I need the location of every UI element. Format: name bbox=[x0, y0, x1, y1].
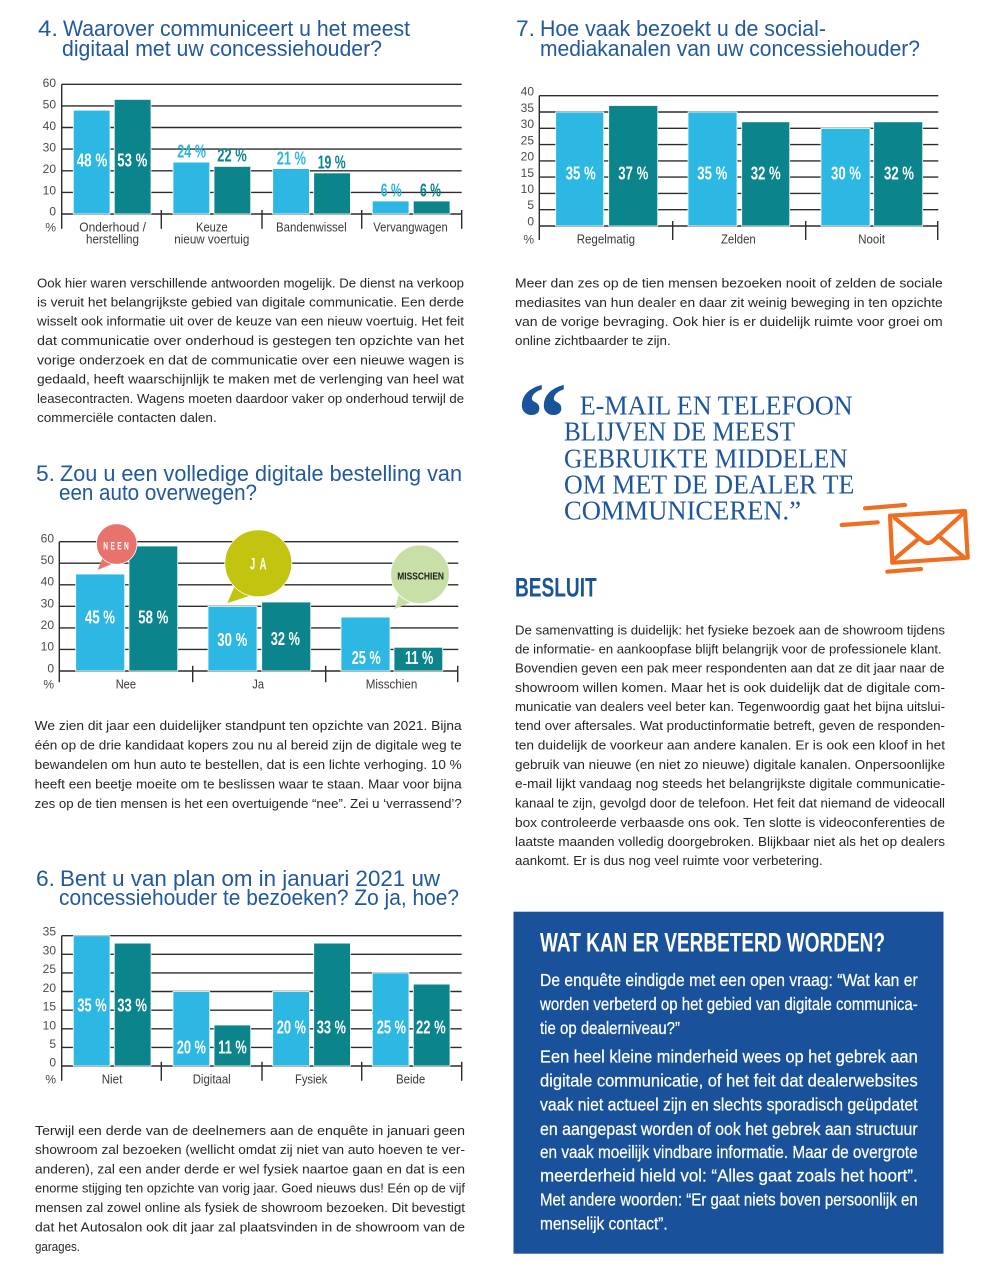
bar chart: question 7: 30 % bbox=[831, 162, 861, 183]
bar chart: question 4: 6 % bbox=[381, 180, 402, 201]
bar chart: question 5: 58 % bbox=[138, 606, 168, 627]
text block: Besluit: tend over aftersales. Wat productinformatie betreft, geven de responden- bbox=[515, 718, 945, 733]
text block: question 6: dat het Autosalon ook dit jaar zal plaatsvinden in de showroom van de bbox=[35, 1219, 465, 1234]
bar chart: question 6: Beide bbox=[396, 1072, 425, 1086]
text block: question 6: showroom zal bezoeken (wellicht omdat zij niet van auto hoeven te ver- bbox=[35, 1142, 465, 1157]
bar chart: question 5: 30 % bbox=[217, 629, 247, 650]
text block: question 6 bbox=[35, 1123, 465, 1254]
bar chart: question 6: 15 bbox=[43, 1000, 56, 1014]
panel text: Met andere woorden: “Er gaat niets boven persoonlijk en bbox=[540, 1190, 918, 1210]
bar chart: question 5: 50 bbox=[41, 553, 54, 567]
bar chart: question 4: % bbox=[45, 220, 56, 234]
panel text: digitale communicatie, of het feit dat dealerwebsites bbox=[540, 1071, 918, 1091]
text block: question 5: heeft een beetje moeite om te beslissen waar te staan. Maar voor bijna bbox=[35, 777, 462, 792]
bar chart: question 7: 35 bbox=[521, 101, 534, 115]
text block: Besluit: ten duidelijk de voorkeur aan andere kanalen. Er is ook een kloof in het bbox=[515, 738, 945, 752]
text block: Besluit: laatste maanden volledig doorgebroken. Blijkbaar niet als het op dealers bbox=[515, 834, 946, 849]
bar chart: question 5: 11 % bbox=[405, 647, 433, 668]
bar chart: question 4: 50 bbox=[43, 98, 56, 112]
text block: question 4: dat communicatie over onderhoud is gestegen ten opzichte van het bbox=[37, 333, 464, 348]
text block: Besluit: kanaal te zijn, gevolgd door de telefoon. Het feit dat niemand de videocall bbox=[515, 796, 945, 810]
bar chart: question 5: 25 % bbox=[352, 647, 381, 668]
bar chart: question 7: 30 bbox=[521, 117, 534, 131]
text block: Besluit bbox=[515, 622, 946, 868]
pull quote: OM MET DE DEALER TE bbox=[564, 469, 854, 499]
bar chart: question 5: Misschien bbox=[366, 677, 417, 691]
speech bubble: MISSCHIEN bbox=[391, 545, 449, 609]
heading: question 6: Bent u van plan om in januari 2021 uw bbox=[60, 866, 440, 891]
bar chart: question 6: 20 bbox=[43, 981, 56, 995]
bar chart: question 6: 20 % bbox=[177, 1036, 206, 1057]
text block: Besluit: de informatie- en aankoopfase blijft belangrijk voor de professionele klant. bbox=[515, 641, 942, 656]
pull quote bbox=[517, 362, 854, 525]
text block: question 6: enorme stijging ten opzichte van vorig jaar. Goed nieuws dus! Eén op de vijf bbox=[35, 1181, 465, 1196]
text block: question 4: commerciële contacten dalen. bbox=[37, 410, 217, 425]
speech bubble: MISSCHIEN: MISSCHIEN bbox=[397, 571, 444, 582]
bar chart: question 5: 20 bbox=[41, 618, 54, 632]
bar chart: question 4: 48 % bbox=[77, 150, 107, 171]
bar chart: question 5: 40 bbox=[41, 574, 54, 588]
bar chart: question 5: 0 bbox=[47, 662, 54, 676]
bar chart: question 6: 22 % bbox=[416, 1016, 446, 1037]
bar chart: question 4: 40 bbox=[43, 119, 56, 133]
bar chart: question 4: Onderhoud / bbox=[79, 221, 147, 235]
bar chart: question 4: Keuze bbox=[196, 221, 228, 235]
text block: question 4: leasecontracten. Wagens moeten daardoor vaker op onderhoud terwijl de bbox=[37, 391, 464, 406]
bar chart: question 4: 0 bbox=[49, 204, 56, 218]
text block: question 7: van de vorige bevraging. Ook hier is er duidelijk ruimte voor groei om bbox=[515, 314, 943, 329]
heading: question 7: mediakanalen van uw concessiehouder? bbox=[540, 36, 920, 61]
heading: question 4: digitaal met uw concessiehouder? bbox=[62, 36, 382, 61]
bar chart: question 4: 53 % bbox=[117, 150, 147, 171]
heading: question 4: Waarover communiceert u het meest bbox=[63, 16, 410, 41]
bar chart: question 6: 35 % bbox=[77, 995, 107, 1016]
bar chart: question 4 bbox=[43, 76, 462, 246]
heading: question 5: 5. bbox=[36, 461, 55, 486]
heading: Besluit: BESLUIT bbox=[515, 573, 597, 603]
bar chart: question 4: herstelling bbox=[86, 232, 139, 246]
panel text: Een heel kleine minderheid wees op het gebrek aan bbox=[540, 1047, 918, 1067]
bar chart: question 5: 10 bbox=[41, 640, 54, 654]
bar chart: question 6: Digitaal bbox=[193, 1072, 231, 1086]
bar chart: question 7: 35 % bbox=[697, 162, 727, 183]
text block: question 7: online zichtbaarder te zijn. bbox=[515, 333, 671, 348]
bar chart: question 6: 11 % bbox=[218, 1036, 247, 1057]
pull quote: BLIJVEN DE MEEST bbox=[564, 417, 795, 447]
bar chart: question 6 bbox=[43, 925, 462, 1086]
quotation mark: “ bbox=[517, 362, 567, 473]
text block: question 6: mensen zal zowel online als fysiek de showroom bezoeken. Dit bevestigt bbox=[35, 1200, 465, 1215]
text block: Besluit: De samenvatting is duidelijk: het fysieke bezoek aan de showroom tijdens bbox=[515, 622, 945, 637]
bar chart: question 7: Regelmatig bbox=[577, 232, 635, 246]
text block: question 5: één op de drie kandidaat kopers zou nu al bereid zijn de digitale weg te bbox=[35, 738, 462, 753]
speech bubble: NEEN bbox=[96, 524, 137, 570]
bar chart: question 4: 30 bbox=[43, 140, 56, 154]
bar chart: question 7: 10 bbox=[521, 182, 534, 196]
bar chart: question 5: Ja bbox=[252, 677, 264, 691]
heading: question 4: 4. bbox=[38, 16, 58, 41]
text block: question 4: gedaald, heeft waarschijnlijk te maken met de verlenging van heel wat bbox=[37, 372, 464, 386]
bar chart: question 7: 32 % bbox=[884, 162, 914, 183]
text block: question 5 bbox=[35, 718, 463, 811]
text block: question 4: vorige onderzoek en dat de communicatie over een nieuwe wagen is bbox=[37, 352, 465, 367]
heading: question 5: een auto overwegen? bbox=[59, 480, 257, 505]
pull quote: COMMUNICEREN.” bbox=[564, 495, 801, 525]
text block: question 6: anderen), zal een ander derde er wel fysiek naartoe gaan en dat is een bbox=[35, 1162, 465, 1176]
bar chart: question 4: 22 % bbox=[217, 145, 247, 166]
bar chart: question 7: % bbox=[523, 232, 534, 246]
bar chart: question 7: 32 % bbox=[751, 162, 781, 183]
bar chart: question 6: 25 bbox=[43, 962, 56, 976]
bar chart: question 7: 35 % bbox=[566, 162, 596, 183]
bar chart: question 7 bbox=[521, 85, 938, 246]
heading: question 7: Hoe vaak bezoekt u de social- bbox=[540, 16, 826, 41]
text block: question 7: Meer dan zes op de tien mensen bezoeken nooit of zelden de sociale bbox=[515, 276, 943, 291]
bar chart: question 6: 35 bbox=[43, 925, 56, 939]
panel text: en aangepast worden of ook het gebrek aan structuur bbox=[540, 1119, 918, 1139]
text block: Besluit: Bovendien geven een pak meer respondenten aan dat ze dit jaar naar de bbox=[515, 660, 944, 676]
panel text: en vaak moeilijk vindbare informatie. Maar de overgrote bbox=[540, 1142, 918, 1162]
bar chart: question 6: Niet bbox=[102, 1072, 123, 1086]
bar chart: question 5: Nee bbox=[116, 677, 136, 691]
bar chart: question 5: 32 % bbox=[271, 628, 300, 649]
bar chart: question 4: 21 % bbox=[277, 147, 306, 168]
heading: question 6 bbox=[36, 866, 459, 910]
speech bubble: JA bbox=[225, 530, 292, 603]
heading: question 5 bbox=[36, 461, 462, 505]
bar chart: question 4: 19 % bbox=[318, 151, 346, 172]
text block: question 4 bbox=[36, 275, 465, 425]
text block: question 6: garages. bbox=[35, 1239, 80, 1254]
bar chart: question 7: Nooit bbox=[858, 232, 885, 246]
panel text: worden verbeterd op het gebied van digitale communica- bbox=[539, 994, 918, 1014]
bar chart: question 4: 20 bbox=[43, 162, 56, 176]
heading: question 5: Zou u een volledige digitale bestelling van bbox=[60, 461, 462, 486]
heading: question 7: 7. bbox=[516, 16, 535, 41]
pull quote: GEBRUIKTE MIDDELEN bbox=[564, 443, 848, 473]
bar chart: question 7: 0 bbox=[527, 214, 534, 228]
speech bubble: JA: JA bbox=[250, 554, 271, 573]
bar chart: question 7: 40 bbox=[521, 85, 534, 99]
bar chart: question 6: 20 % bbox=[277, 1016, 306, 1037]
bar chart: question 7: 5 bbox=[527, 198, 534, 212]
text block: question 4: wisselt ook informatie uit over de keuze van een nieuw voertuig. Het feit bbox=[36, 314, 464, 329]
panel text: tie op dealerniveau?” bbox=[540, 1018, 680, 1038]
bar chart: question 7: Zelden bbox=[721, 232, 756, 246]
bar chart: question 5 bbox=[41, 524, 458, 691]
text block: question 5: bewandelen om hun auto te bestellen, dat is een lichte verhoging. 10 % bbox=[35, 757, 462, 772]
bar chart: question 6: 0 bbox=[49, 1056, 56, 1070]
panel text: vaak niet actueel zijn en slechts sporadisch geüpdatet bbox=[540, 1095, 918, 1115]
text block: question 7: mediasites van hun dealer en daar zit weinig beweging in ten opzichte bbox=[515, 295, 943, 310]
text block: question 4: is veruit het belangrijkste gebied van digitale communicatie. Een derde bbox=[37, 294, 464, 310]
text block: Besluit: aankomt. Er is dus nog veel ruimte voor verbetering. bbox=[515, 853, 823, 868]
text block: Besluit: e-mail lijkt vandaag nog steeds het belangrijkste digitale communicatie- bbox=[515, 776, 945, 791]
bar chart: question 4: 10 bbox=[43, 184, 56, 198]
text block: question 7 bbox=[515, 276, 943, 348]
text block: Besluit: showroom willen komen. Maar het is ook duidelijk dat de digitale com- bbox=[515, 680, 945, 695]
bar chart: question 7: 15 bbox=[521, 166, 534, 180]
bar chart: question 5: 30 bbox=[41, 596, 54, 610]
bar chart: question 6: % bbox=[45, 1072, 56, 1086]
panel text bbox=[539, 970, 918, 1233]
text block: question 4: Ook hier waren verschillende antwoorden mogelijk. De dienst na verkoop bbox=[37, 275, 464, 290]
icon: flying envelope bbox=[842, 505, 968, 572]
speech bubble: NEEN: NEEN bbox=[103, 540, 131, 552]
bar chart: question 6: 25 % bbox=[377, 1016, 406, 1037]
bar chart: question 4: 60 bbox=[43, 76, 56, 90]
bar chart: question 6: 30 bbox=[43, 943, 56, 957]
bar chart: question 6: 10 bbox=[43, 1018, 56, 1032]
heading: question 6: 6. bbox=[36, 866, 55, 891]
bar chart: question 5: % bbox=[43, 677, 54, 691]
panel text: meerderheid hield vol: “Alles gaat zoals het hoort”. bbox=[540, 1166, 918, 1186]
pull quote: E-MAIL EN TELEFOON bbox=[580, 390, 853, 420]
bar chart: question 7: 20 bbox=[521, 150, 534, 164]
bar chart: question 4: 24 % bbox=[177, 140, 206, 161]
bar chart: question 5: 60 bbox=[41, 532, 54, 546]
bar chart: question 5: 45 % bbox=[85, 606, 115, 627]
heading: question 7 bbox=[516, 16, 920, 61]
heading: question 6: concessiehouder te bezoeken? Zo ja, hoe? bbox=[59, 885, 459, 910]
panel text: menselijk contact”. bbox=[540, 1213, 668, 1233]
bar chart: question 6: 5 bbox=[49, 1037, 56, 1051]
bar chart: question 7: 25 bbox=[521, 133, 534, 147]
bar chart: question 6: 33 % bbox=[117, 995, 147, 1016]
text block: question 5: We zien dit jaar een duidelijker standpunt ten opzichte van 2021. Bijna bbox=[35, 718, 463, 733]
heading: question 4 bbox=[38, 16, 410, 61]
text block: question 6: Terwijl een derde van de deelnemers aan de enquête in januari geen bbox=[35, 1123, 465, 1138]
bar chart: question 4: Vervangwagen bbox=[373, 221, 448, 235]
bar chart: question 4: 6 % bbox=[420, 180, 441, 201]
bar chart: question 4: Bandenwissel bbox=[276, 221, 347, 235]
bar chart: question 6: 33 % bbox=[317, 1016, 346, 1037]
panel text: De enquête eindigde met een open vraag: “Wat kan er bbox=[540, 970, 918, 990]
text block: Besluit: municatie van dealers veel beter kan. Tegenwoordig gaat het bijna uitslui- bbox=[515, 699, 945, 714]
bar chart: question 4: nieuw voertuig bbox=[174, 232, 249, 246]
text block: Besluit: box controleerde verbaasde ons ook. Ten slotte is videoconferenties de bbox=[515, 815, 945, 830]
bar chart: question 7: 37 % bbox=[618, 162, 648, 183]
text block: Besluit: gebruik van nieuwe (en niet zo nieuwe) digitale kanalen. Onpersoonlijke bbox=[515, 757, 945, 772]
panel: Wat kan er verbeterd worden bbox=[514, 912, 944, 1254]
text block: question 5: zes op de tien mensen is het een overtuigende “nee”. Zei u ‘verrassend’? bbox=[35, 796, 462, 811]
bar chart: question 6: Fysiek bbox=[295, 1072, 328, 1086]
